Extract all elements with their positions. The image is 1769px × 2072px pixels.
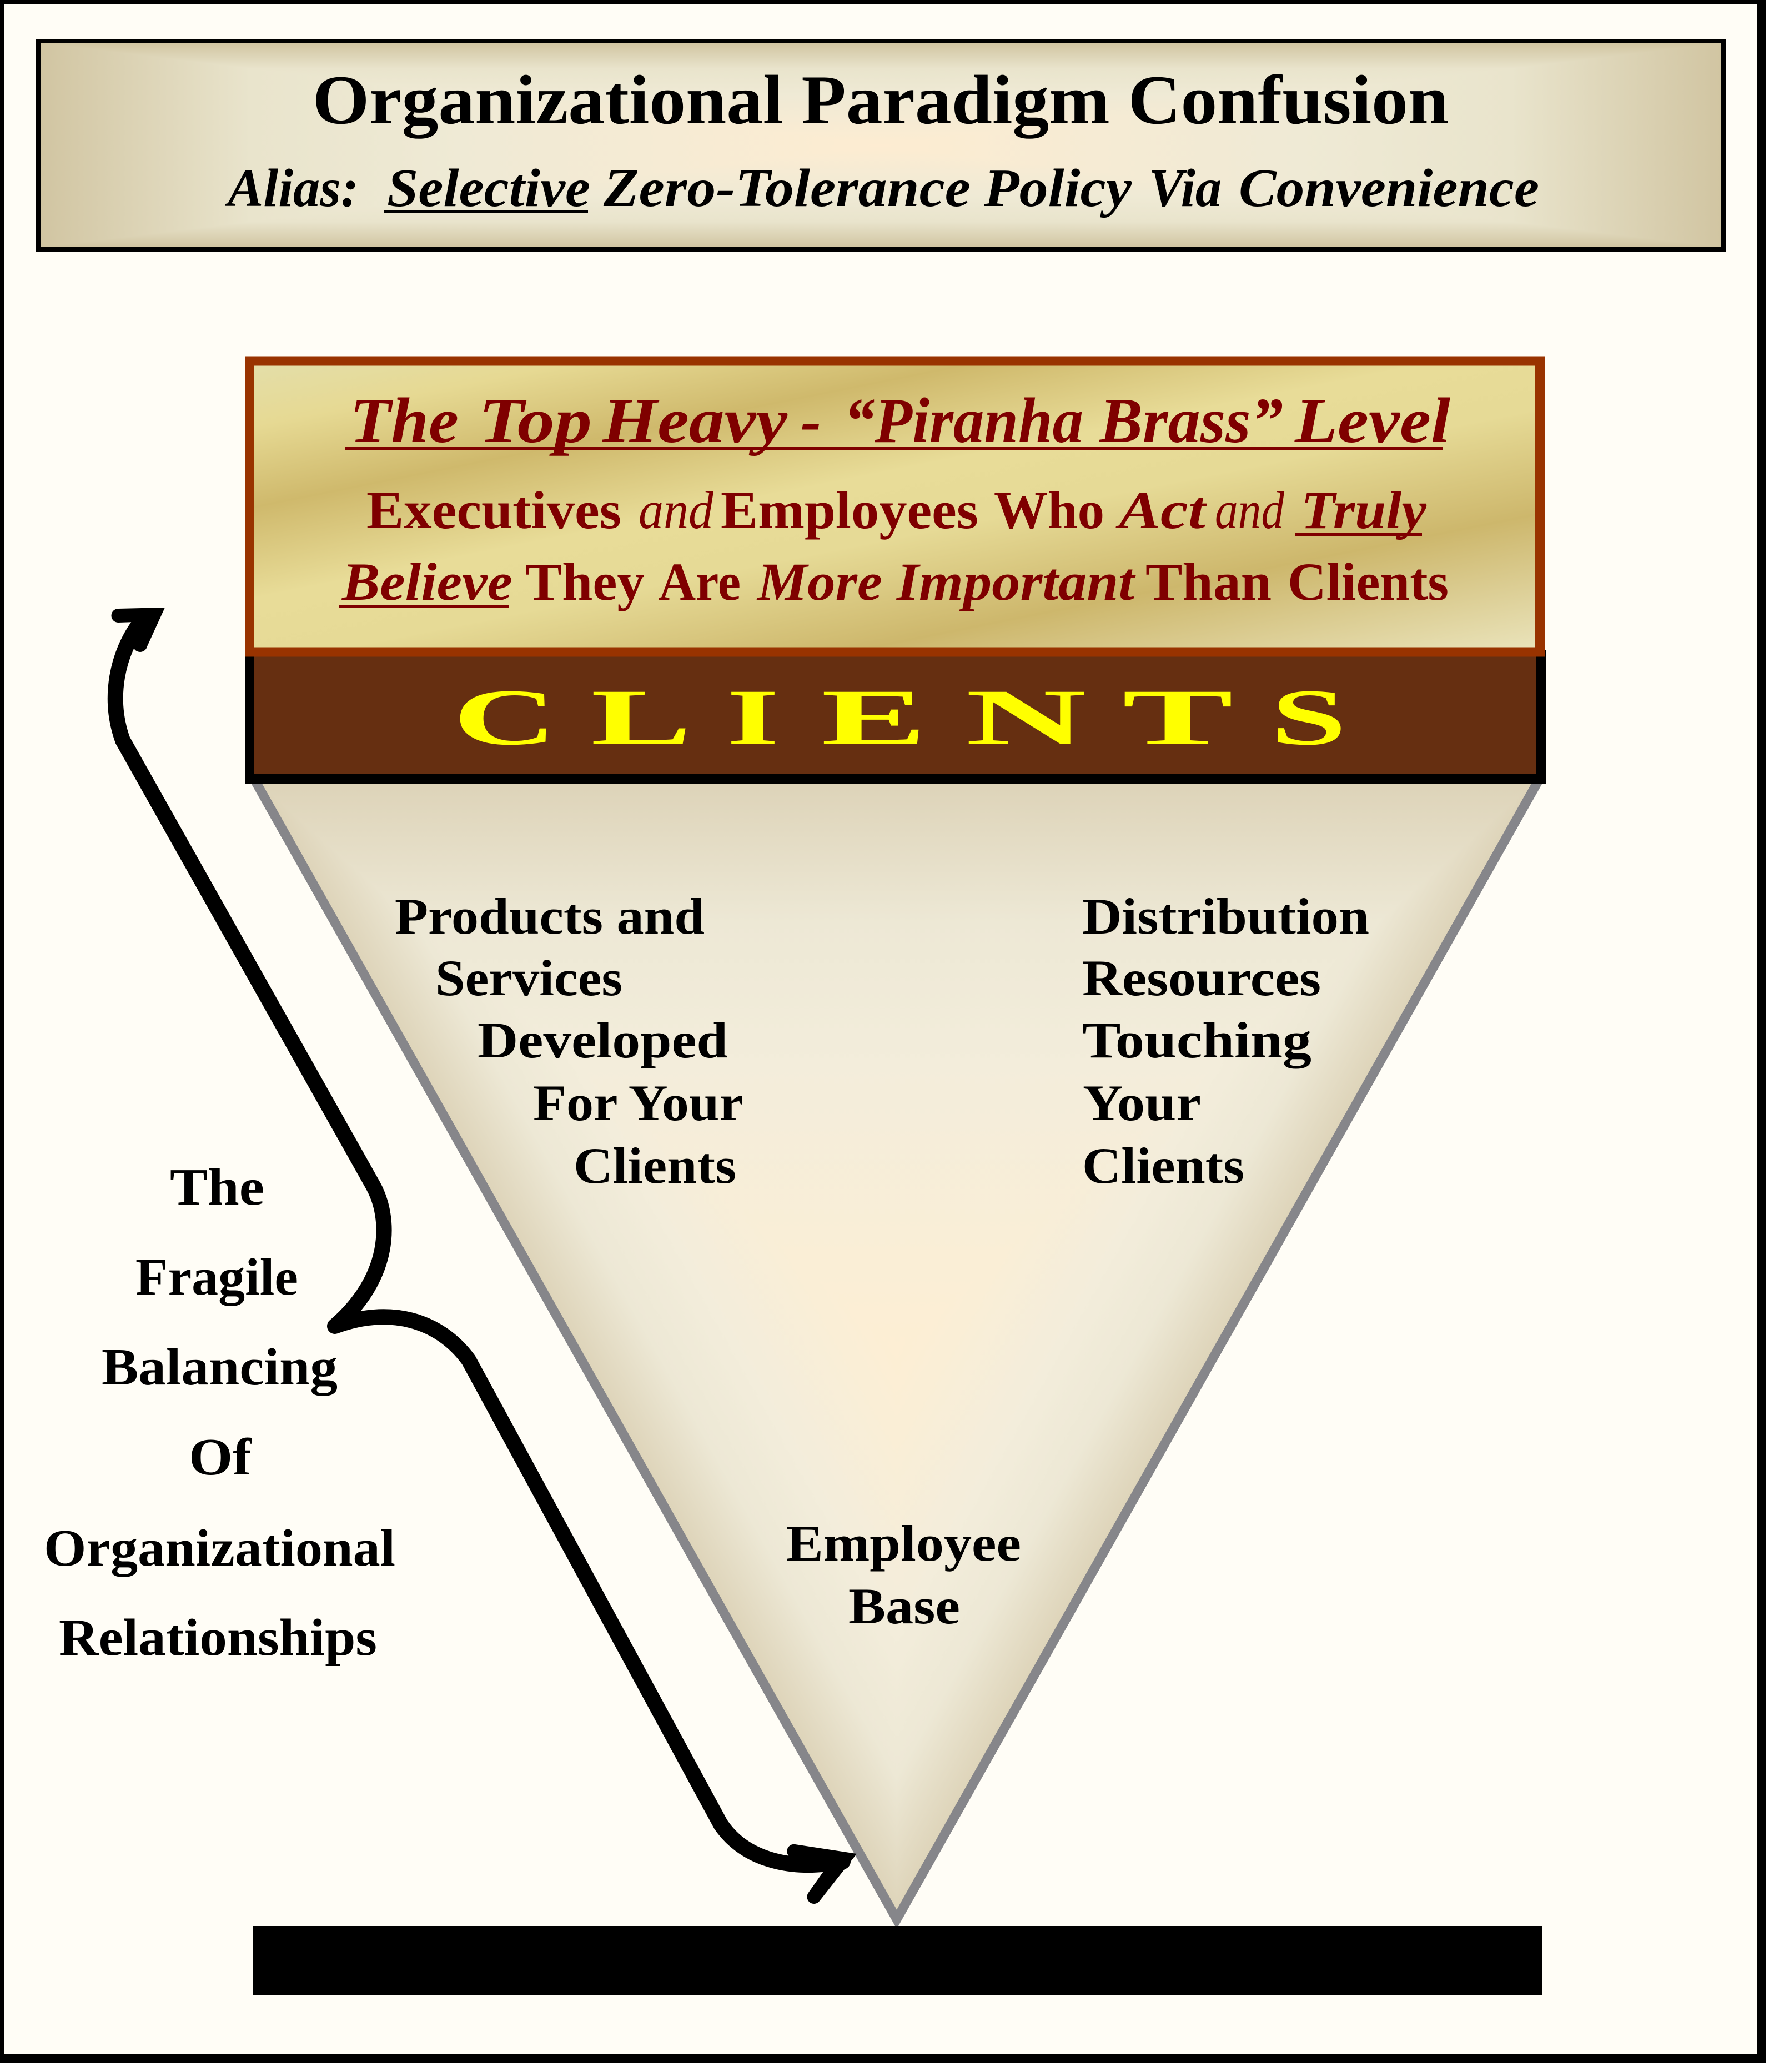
- text: employee base: Base: [848, 1578, 960, 1634]
- text: products and services: Products and: [395, 888, 705, 945]
- text: distribution resources: Your: [1083, 1075, 1201, 1131]
- label: clients: I: [727, 674, 779, 762]
- text: believe more important: [339, 552, 1449, 611]
- text: fragile balancing label: Balancing: [102, 1338, 338, 1396]
- text: products and services: Services: [435, 950, 622, 1006]
- label: clients: L: [591, 674, 692, 762]
- subtitle: alias line: Alias:: [224, 158, 359, 218]
- label: clients: N: [966, 674, 1087, 762]
- text: executives and employees: and: [1215, 480, 1285, 540]
- text: executives and employees: [366, 480, 1426, 540]
- label: clients: T: [1122, 674, 1233, 762]
- text: executives and employees: Truly: [1301, 480, 1426, 540]
- text: fragile balancing label: Organizational: [44, 1519, 395, 1577]
- subtitle: alias line: [224, 158, 1539, 218]
- text: believe more important: They: [525, 552, 645, 611]
- panel: piranha brass level: [250, 361, 1540, 652]
- text: fragile balancing label: The: [170, 1158, 264, 1216]
- text: fragile balancing label: [44, 1158, 395, 1667]
- text: fragile balancing label: Relationships: [59, 1609, 377, 1667]
- arrow: curly brace double arrow: [111, 608, 857, 1904]
- text: products and services: [395, 888, 743, 1194]
- subtitle: alias line: Convenience: [1239, 158, 1539, 218]
- heading: top heavy level: [345, 385, 1451, 456]
- heading: top heavy level: -: [801, 385, 821, 456]
- text: employee base: Employee: [786, 1515, 1021, 1572]
- heading: top heavy level: Top: [479, 385, 592, 456]
- text: employee base: [786, 1515, 1021, 1634]
- text: distribution resources: Clients: [1082, 1137, 1244, 1194]
- text: believe more important: Important: [896, 552, 1137, 611]
- panel: inverted triangle: [253, 777, 1540, 1919]
- panel: clients bar: [245, 650, 1546, 784]
- text: executives and employees: Who: [994, 480, 1104, 540]
- base bar: [253, 1926, 1542, 1995]
- text: distribution resources: Resources: [1082, 950, 1321, 1006]
- heading: top heavy level: The: [350, 385, 459, 456]
- heading: top heavy level: Heavy: [602, 385, 788, 456]
- text: executives and employees: Employees: [721, 480, 978, 540]
- label: clients: E: [821, 674, 927, 762]
- text: believe more important: Believe: [341, 552, 512, 611]
- subtitle: alias line: Selective: [387, 158, 590, 218]
- text: fragile balancing label: Of: [189, 1428, 253, 1486]
- heading: main title: Organizational Paradigm Confusion: [313, 62, 1449, 139]
- label: clients: [453, 674, 1346, 762]
- text: distribution resources: [1082, 888, 1369, 1194]
- text: products and services: Developed: [478, 1012, 728, 1068]
- subtitle: alias line: Via: [1149, 158, 1222, 218]
- text: products and services: For Your: [533, 1075, 743, 1131]
- text: believe more important: Than: [1145, 552, 1272, 611]
- text: executives and employees: and: [639, 480, 714, 540]
- heading: top heavy level: Brass”: [1098, 385, 1283, 456]
- text: distribution resources: Distribution: [1082, 888, 1369, 945]
- text: executives and employees: Executives: [366, 480, 621, 540]
- label: clients: S: [1271, 674, 1346, 762]
- heading: top heavy level: “Piranha: [844, 385, 1083, 456]
- text: believe more important: Are: [659, 552, 741, 611]
- text: believe more important: Clients: [1288, 552, 1449, 611]
- text: believe more important: More: [756, 552, 882, 611]
- subtitle: alias line: Zero-Tolerance: [603, 158, 971, 218]
- panel: title banner: [36, 39, 1726, 252]
- text: products and services: Clients: [574, 1137, 736, 1194]
- text: executives and employees: Act: [1115, 480, 1208, 540]
- heading: top heavy level: Level: [1294, 385, 1451, 456]
- text: fragile balancing label: Fragile: [135, 1248, 298, 1306]
- text: distribution resources: Touching: [1082, 1012, 1311, 1068]
- subtitle: alias line: Policy: [983, 158, 1132, 218]
- label: clients: C: [453, 674, 557, 762]
